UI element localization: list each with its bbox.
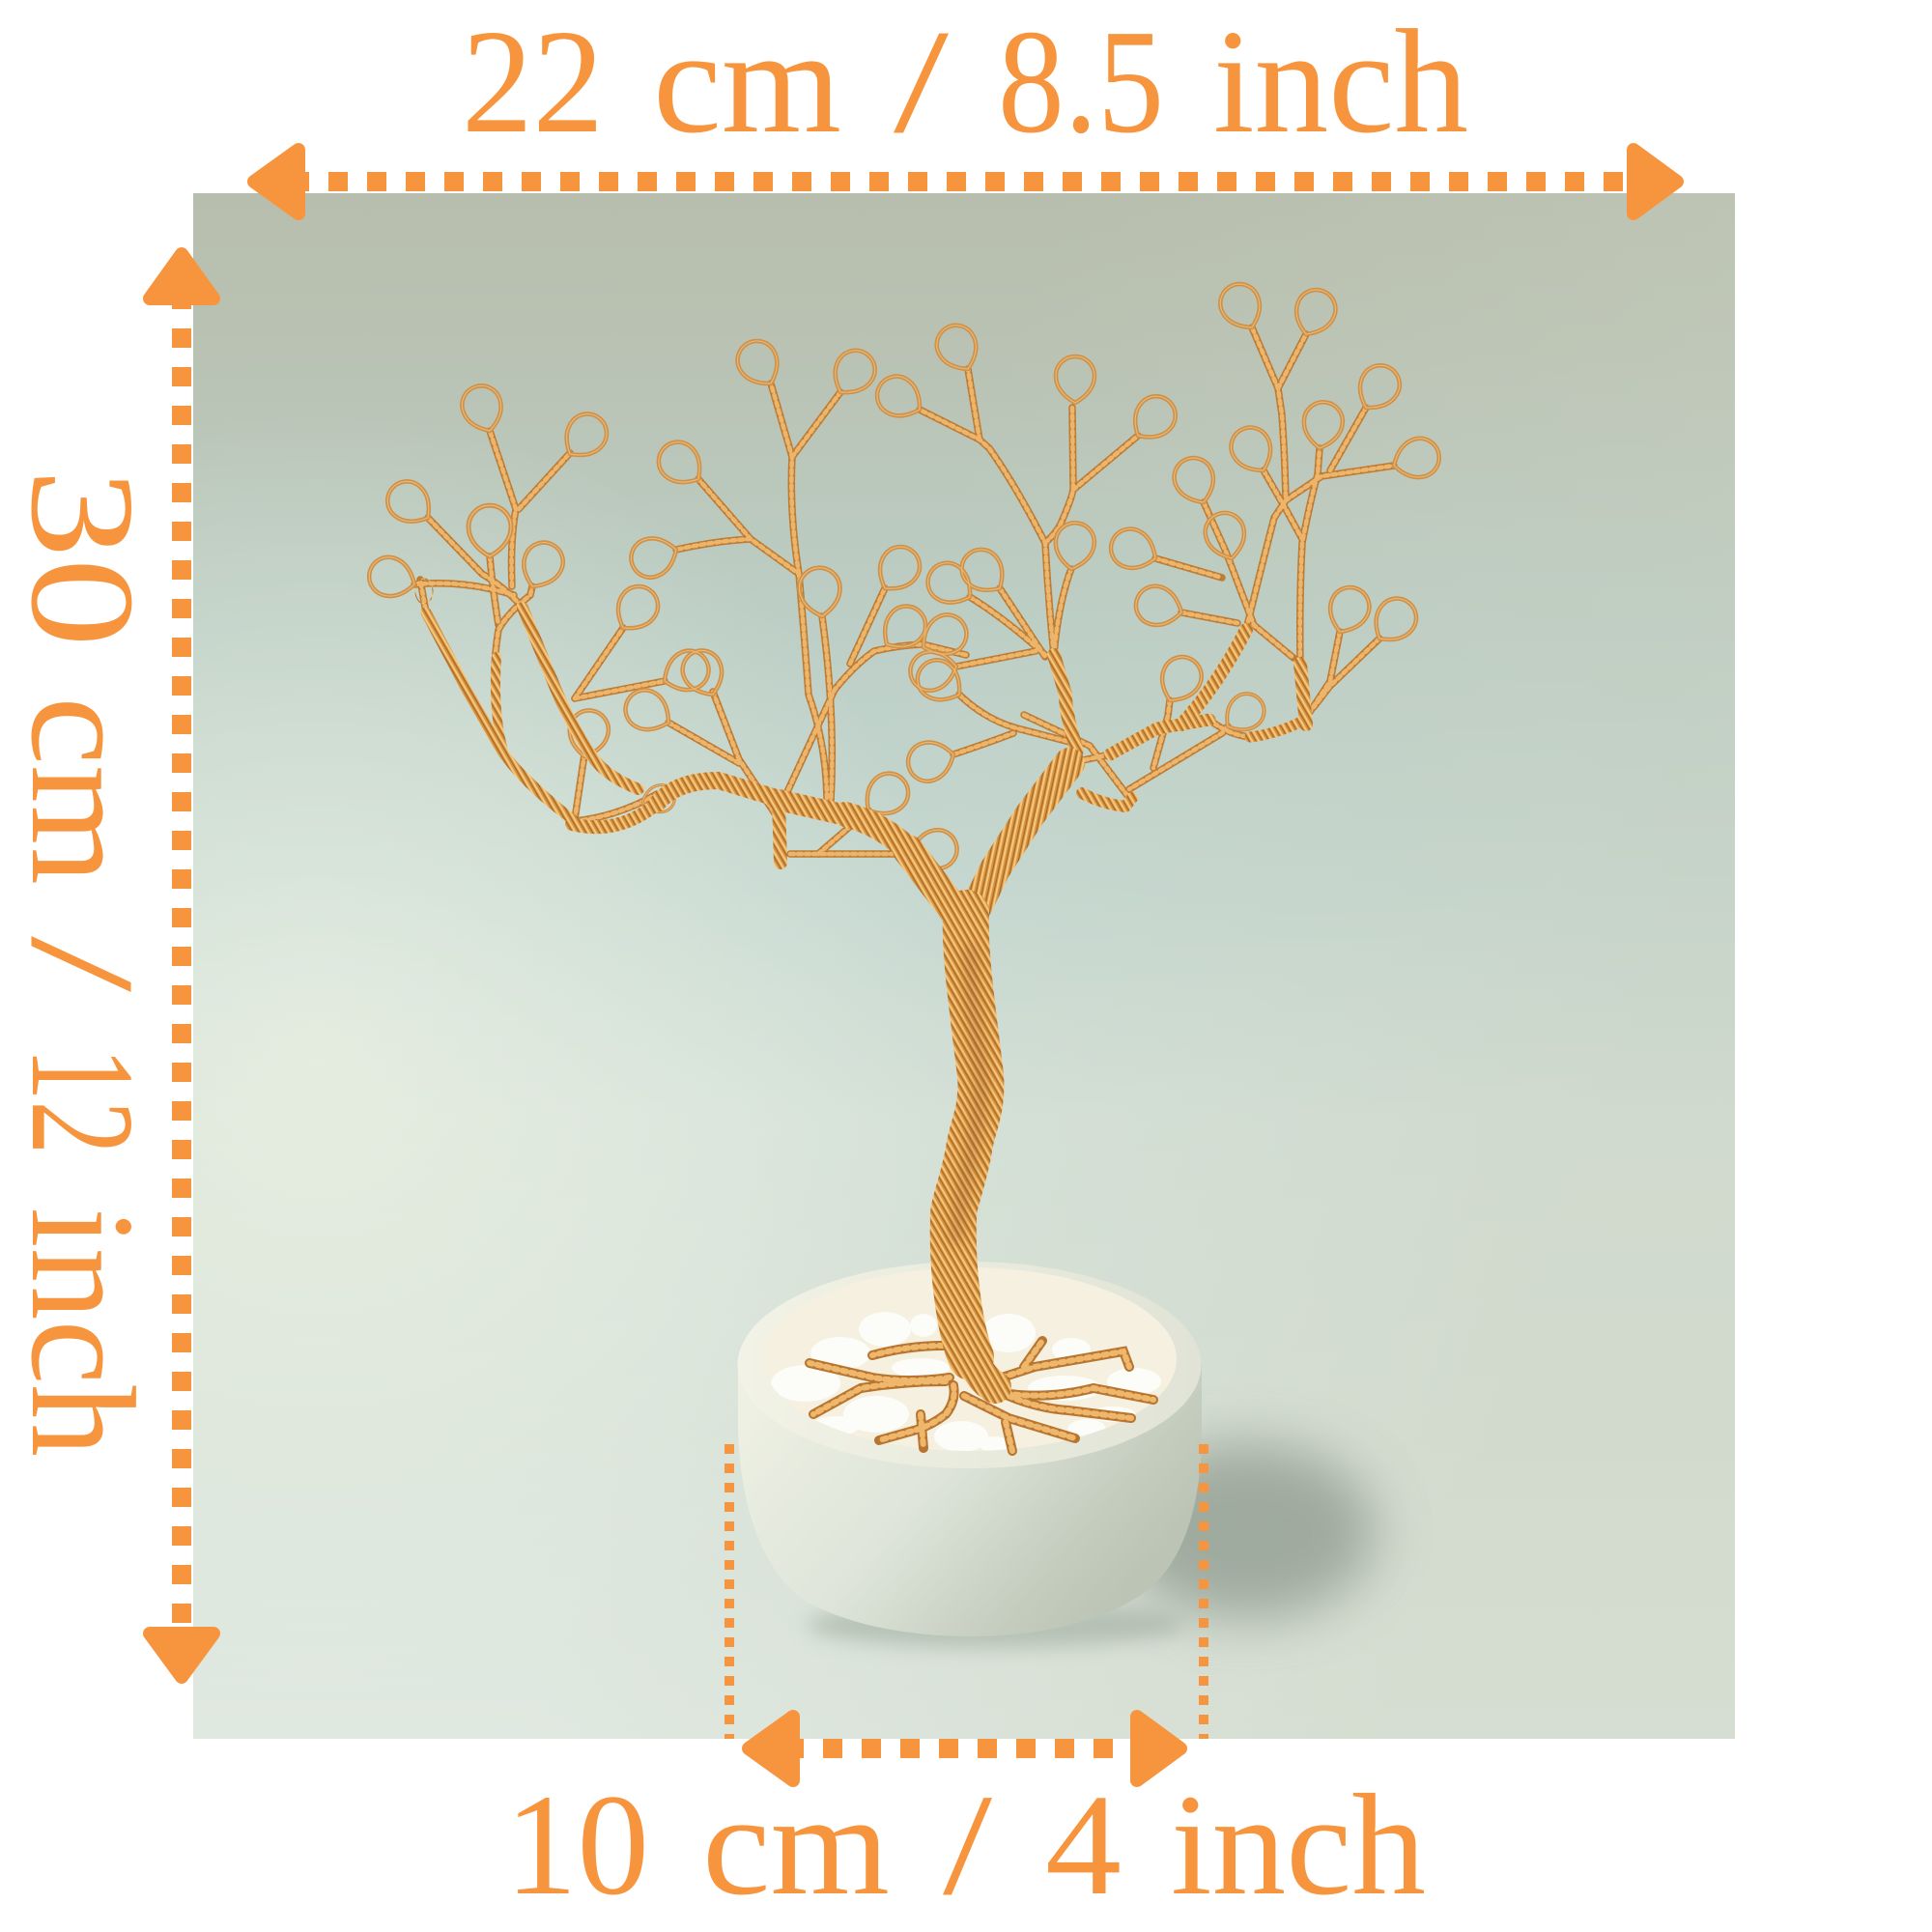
heavier branch strands [415, 579, 1306, 863]
height label: 30 [0, 469, 164, 647]
base width label: / [943, 1765, 992, 1925]
base width label: cm [702, 1765, 890, 1925]
wire branches [414, 327, 1394, 854]
base width label: inch [1171, 1765, 1426, 1925]
pot left guide line [724, 1444, 734, 1739]
wire loops on branch tips [364, 277, 1444, 873]
base width dimension arrow [749, 1717, 1180, 1780]
width label [462, 0, 1468, 164]
width label: 22 [462, 0, 604, 164]
width dimension arrow [254, 150, 1677, 213]
white concrete pot [738, 1262, 1202, 1636]
base width label: 4 [1045, 1765, 1122, 1925]
pot right guide line [1199, 1444, 1208, 1739]
white pebbles [771, 1312, 1161, 1452]
height label: 12 [0, 1047, 164, 1154]
photo panel background [193, 193, 1735, 1739]
width label: / [894, 0, 949, 164]
thick limbs and trunk [572, 763, 1069, 1387]
pot shadow [807, 1442, 1377, 1648]
height label: cm [0, 696, 164, 885]
base width label [505, 1765, 1426, 1925]
width label: 8.5 [998, 0, 1164, 164]
height label: / [0, 936, 164, 992]
height label [0, 469, 164, 1457]
height dimension arrow [150, 254, 213, 1677]
width label: inch [1213, 0, 1468, 164]
twisted wire roots [810, 1341, 1153, 1451]
height label: inch [0, 1208, 164, 1457]
width label: cm [653, 0, 841, 164]
base width label: 10 [505, 1765, 649, 1925]
